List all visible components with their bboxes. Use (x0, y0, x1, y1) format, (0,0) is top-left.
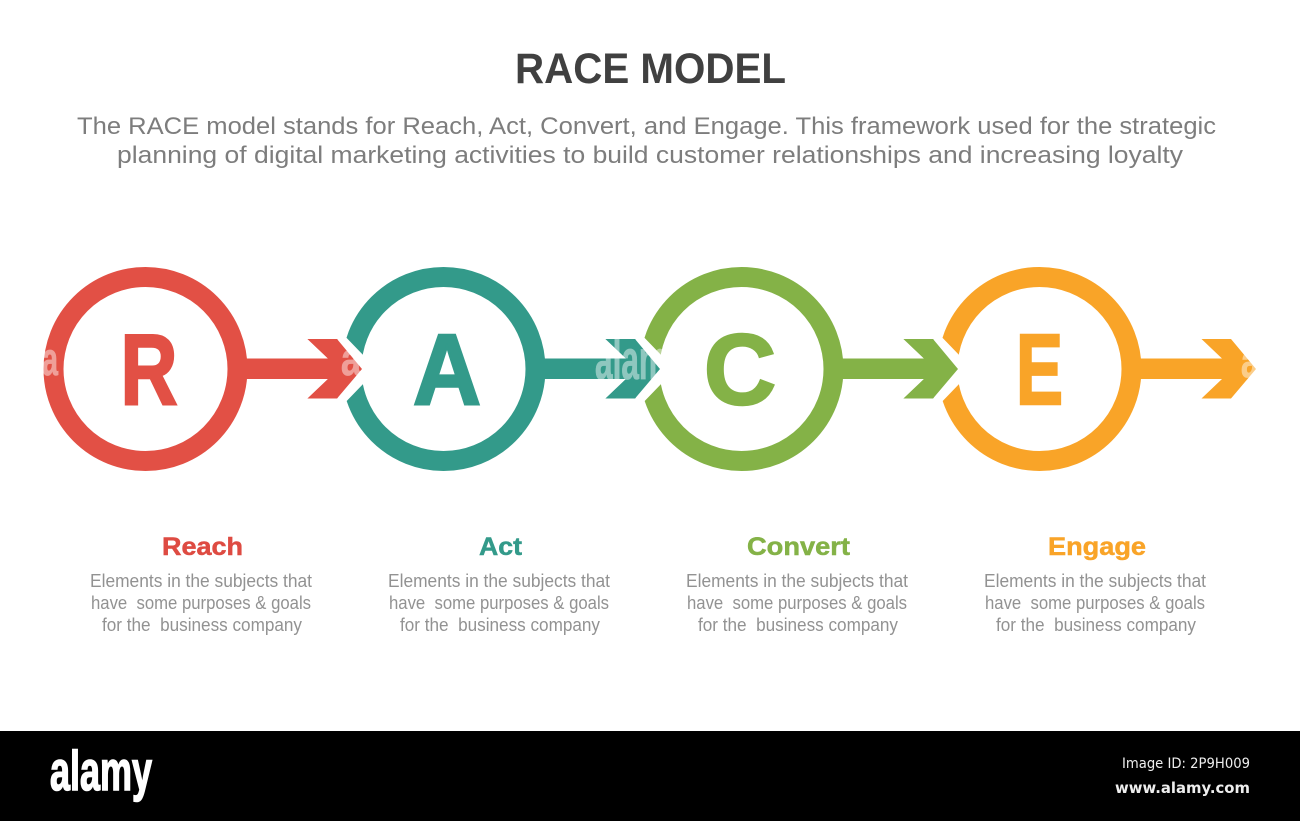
letter A: A (413, 314, 481, 426)
column: Reach (90, 533, 312, 635)
description: Act (388, 571, 610, 635)
logo: alamy: alamy (50, 739, 152, 802)
footer band (0, 731, 1300, 821)
step 1: Reach circle and arrow (54, 277, 362, 461)
ring: Reach (54, 277, 238, 461)
column: Convert (686, 533, 908, 635)
gap in Act ring (338, 329, 366, 410)
watermark fragments: alam (595, 328, 667, 391)
column: Act (388, 533, 610, 635)
website: www.alamy.com (1115, 779, 1250, 797)
heading: Reach: Reach (162, 533, 243, 561)
subtitle text block: planning of digital marketing activities to build customer relationships and increasing loyalty (117, 142, 1184, 169)
step 4: Engage circle and arrow (836, 277, 1256, 461)
description: Act: for the business company (400, 615, 600, 635)
gap in Convert ring (636, 329, 664, 410)
watermark fragments (42, 328, 1259, 391)
watermark fragments: a (42, 333, 58, 385)
ring: Act (352, 277, 536, 461)
column: Engage (984, 533, 1206, 635)
description: Reach: have some purposes & goals (91, 593, 311, 613)
watermark fragments: a (341, 333, 361, 385)
description: Reach: for the business company (102, 615, 302, 635)
subtitle text block: The RACE model stands for Reach, Act, Convert, and Engage. This framework used for the strategic (77, 113, 1216, 140)
title: RACE MODEL (515, 45, 786, 93)
heading: Convert: Convert (747, 533, 851, 561)
description: Reach: Elements in the subjects that (90, 571, 312, 591)
letter C: C (704, 314, 776, 426)
description: Engage: Elements in the subjects that (984, 571, 1206, 591)
description: Convert: Elements in the subjects that (686, 571, 908, 591)
arrow: Reach to Act (240, 339, 362, 398)
description: Act: have some purposes & goals (389, 593, 609, 613)
description: Convert: have some purposes & goals (687, 593, 907, 613)
gap in Engage ring (934, 329, 962, 410)
description: Engage: have some purposes & goals (985, 593, 1205, 613)
description: Engage (984, 571, 1206, 635)
step 3: Convert circle and arrow (538, 277, 958, 461)
subtitle text block (77, 113, 1216, 169)
image id: Image ID: 2P9H009 (1122, 756, 1250, 772)
description: Engage: for the business company (996, 615, 1196, 635)
ring: Engage (948, 277, 1132, 461)
description: Reach (90, 571, 312, 635)
heading: Engage: Engage (1048, 533, 1146, 561)
arrow: Act to Convert (538, 339, 660, 398)
description: Convert (686, 571, 908, 635)
ring: Convert (650, 277, 834, 461)
description: Convert: for the business company (698, 615, 898, 635)
watermark fragments: a (1241, 335, 1259, 387)
arrow: Engage outgoing (1134, 339, 1256, 398)
arrow: Convert to Engage (836, 339, 958, 398)
letter R: R (120, 314, 178, 426)
step 2: Act circle and arrow (240, 277, 660, 461)
letter E: E (1016, 314, 1063, 426)
heading: Act: Act (479, 533, 523, 561)
description: Act: Elements in the subjects that (388, 571, 610, 591)
